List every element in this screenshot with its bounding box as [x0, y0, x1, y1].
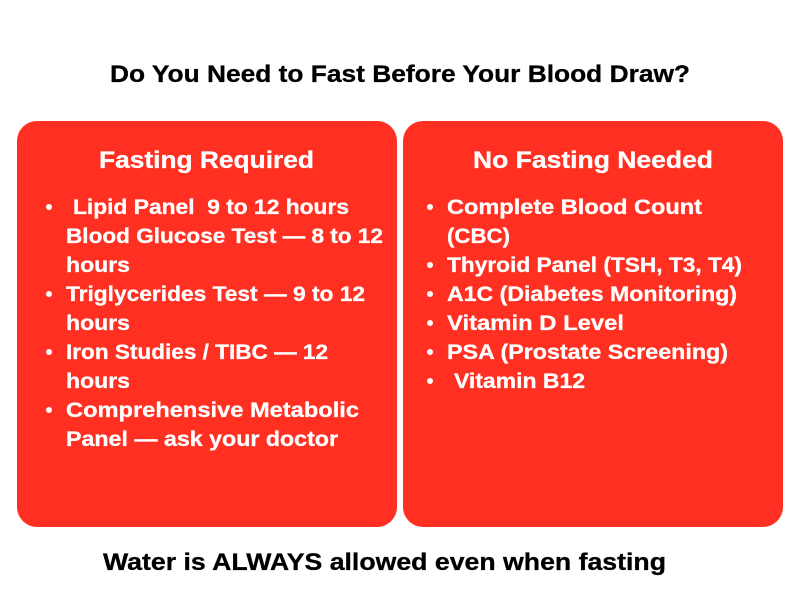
list: fasting tests	[46, 195, 383, 451]
list: fasting tests: hours	[66, 311, 130, 335]
list: non-fasting tests: Vitamin B12	[454, 369, 585, 393]
list: fasting tests: Iron Studies / TIBC — 12	[66, 340, 328, 364]
list: non-fasting tests: Vitamin D Level	[447, 311, 624, 335]
list: fasting tests: Triglycerides Test — 9 to 12	[66, 282, 365, 306]
list: fasting tests: Panel — ask your doctor	[66, 427, 339, 451]
panel: no fasting needed	[403, 121, 783, 527]
panel: fasting required	[17, 121, 397, 527]
list: fasting tests: Lipid Panel 9 to 12 hours	[73, 195, 349, 219]
list: non-fasting tests	[427, 195, 742, 393]
list: fasting tests: Blood Glucose Test — 8 to 12	[66, 224, 383, 248]
list: non-fasting tests: PSA (Prostate Screening)	[447, 340, 728, 364]
footer note: Water is ALWAYS allowed even when fasting	[103, 549, 666, 576]
list: non-fasting tests: (CBC)	[447, 224, 510, 248]
list: non-fasting tests: A1C (Diabetes Monitoring)	[447, 282, 737, 306]
heading: fasting required: Fasting Required	[99, 147, 314, 174]
list: fasting tests: hours	[66, 253, 130, 277]
list: fasting tests: Comprehensive Metabolic	[66, 398, 359, 422]
list: non-fasting tests: Complete Blood Count	[447, 195, 702, 219]
heading: no fasting needed: No Fasting Needed	[473, 147, 713, 174]
list: fasting tests: hours	[66, 369, 130, 393]
title: Do You Need to Fast Before Your Blood Draw?	[110, 61, 690, 88]
list: non-fasting tests: Thyroid Panel (TSH, T3, T4)	[447, 253, 742, 277]
